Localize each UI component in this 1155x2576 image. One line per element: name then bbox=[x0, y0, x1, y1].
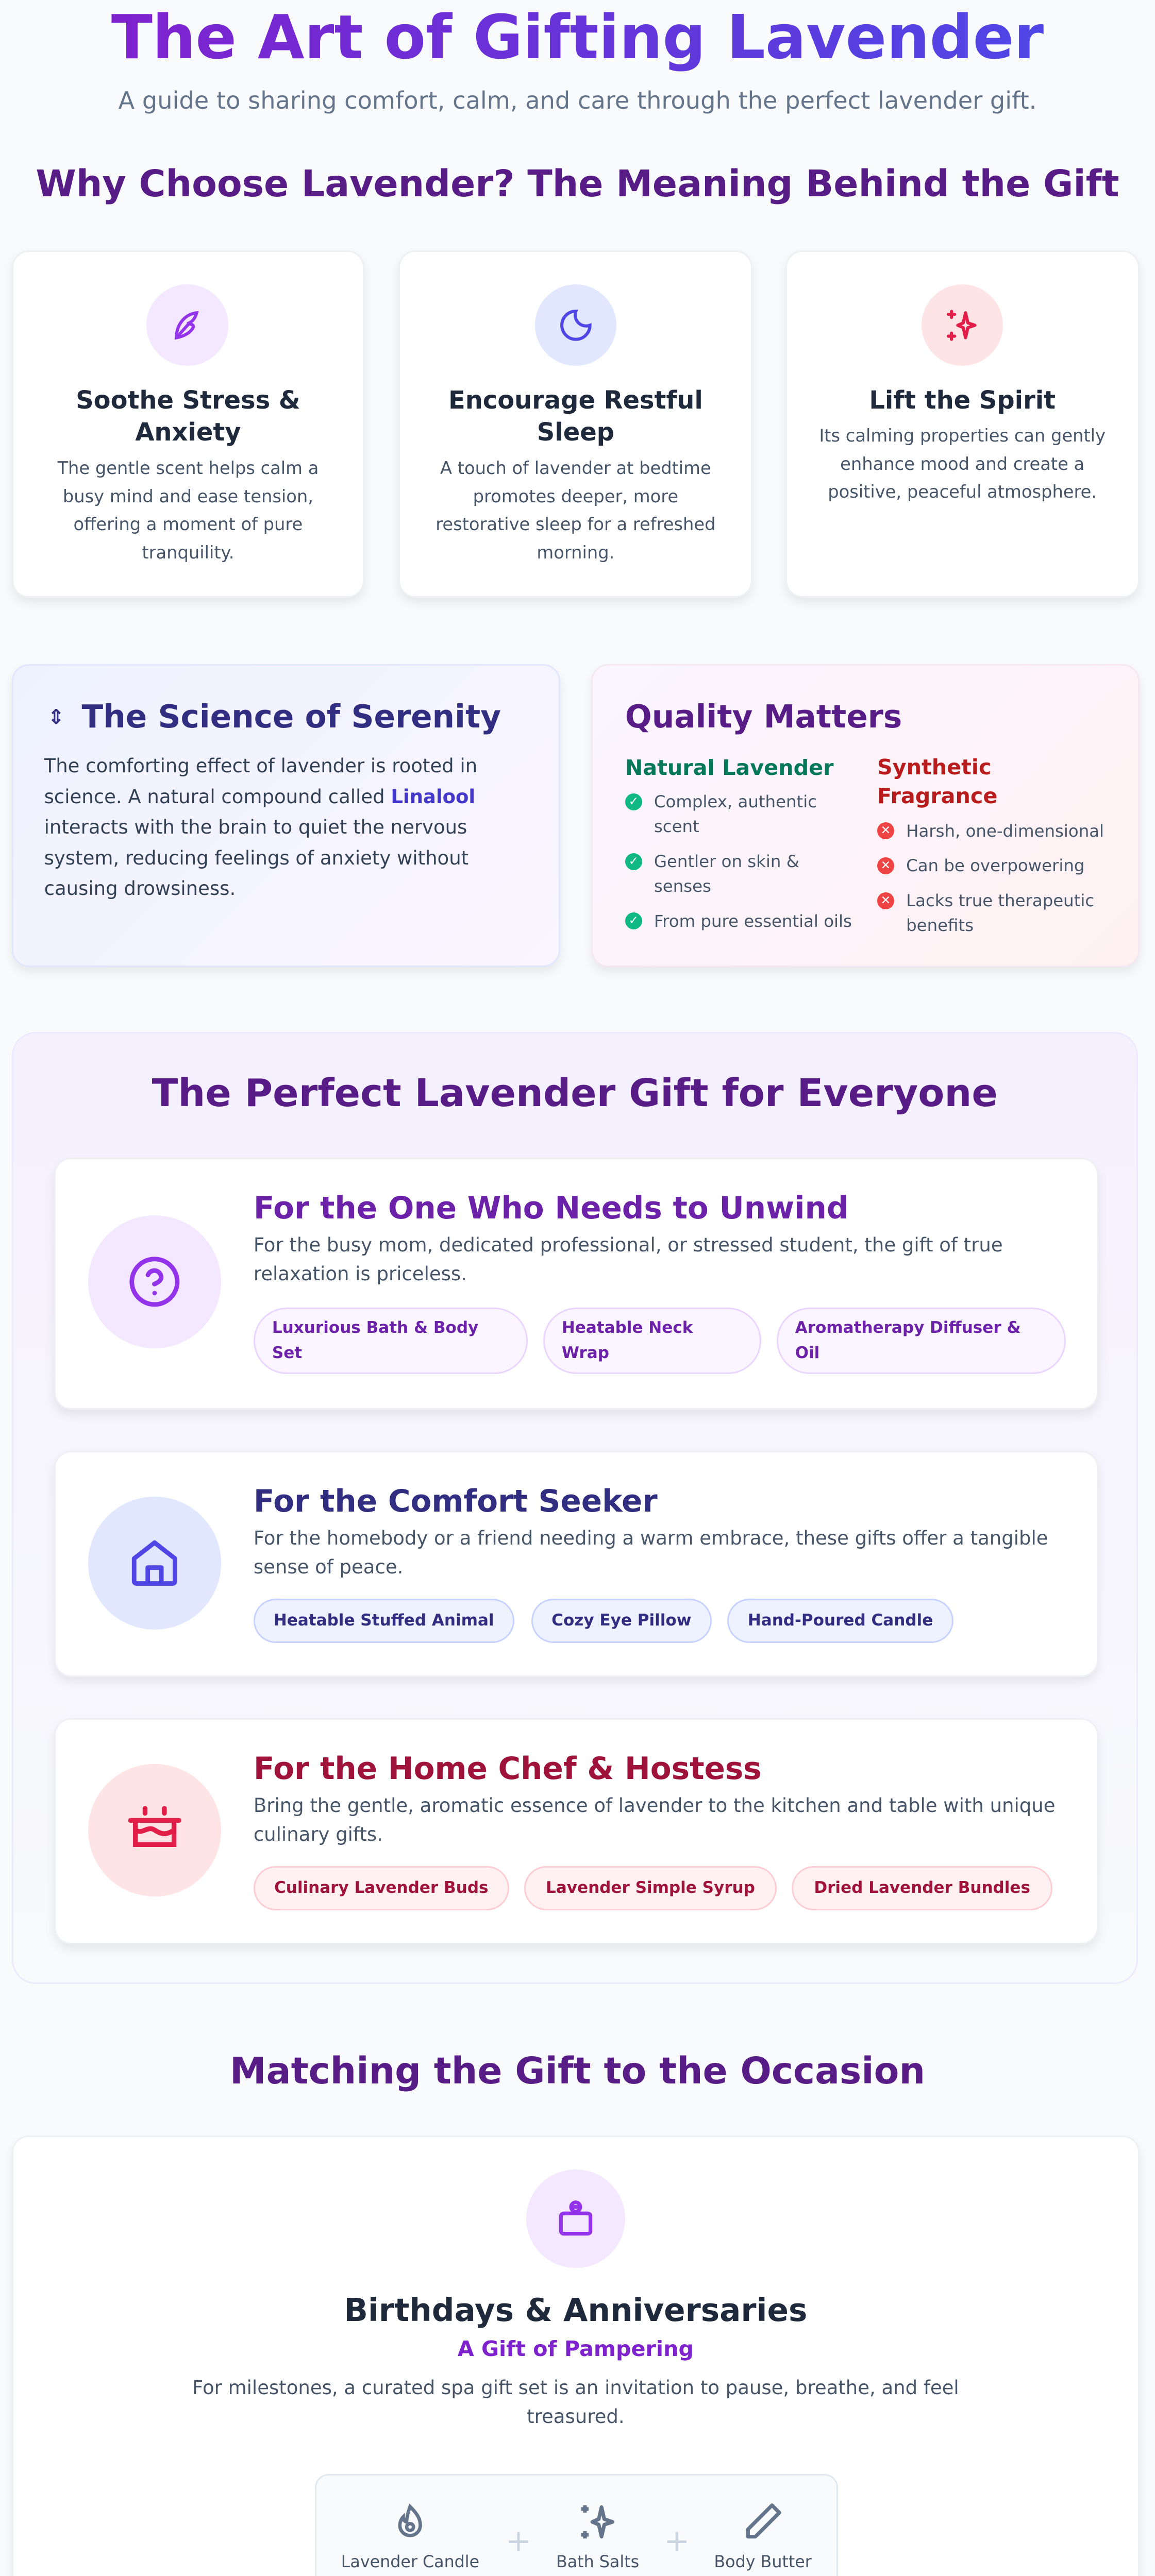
item: body butter bbox=[714, 2503, 812, 2571]
panel: birthdays & anniversaries bbox=[12, 2136, 1140, 2576]
description: Bring the gentle, aromatic essence of lavender to the kitchen and table with unique culinary gifts. bbox=[254, 1794, 1055, 1845]
title: For the Comfort Seeker bbox=[254, 1484, 658, 1519]
gift card: home chef: Lavender Simple Syrup bbox=[546, 1878, 755, 1897]
gift card: comfort seeker: Hand-Poured Candle bbox=[748, 1611, 933, 1630]
occasion text: For milestones, a curated spa gift set is an invitation to pause, breathe, and feel treasured. bbox=[192, 2377, 959, 2428]
panel: science of serenity bbox=[12, 664, 560, 967]
card title: Soothe Stress & bbox=[76, 386, 300, 415]
description: For the busy mom, dedicated professional, or stressed student, the gift of true relaxation is priceless. bbox=[254, 1234, 1003, 1285]
title: The Art of Gifting Lavender bbox=[111, 2, 1044, 73]
icon: sparkles bbox=[922, 284, 1003, 366]
item: body butter: Body Butter bbox=[714, 2553, 812, 2571]
icon: moon bbox=[535, 284, 616, 366]
item: candle: Lavender Candle bbox=[341, 2553, 479, 2571]
gift card: comfort seeker: Cozy Eye Pillow bbox=[551, 1611, 691, 1630]
item: candle bbox=[341, 2503, 479, 2571]
gift card: unwind: Aromatherapy Diffuser & Oil bbox=[795, 1318, 1021, 1362]
panel: lift the spirit bbox=[785, 250, 1140, 598]
card text: The gentle scent helps calm a busy mind and ease tension, offering a moment of pure tranquility. bbox=[57, 458, 319, 563]
subtitle: A guide to sharing comfort, calm, and care through the perfect lavender gift. bbox=[119, 87, 1036, 114]
gift card: home chef: Dried Lavender Bundles bbox=[814, 1878, 1030, 1897]
tags: Heatable Stuffed Animal bbox=[274, 1611, 494, 1630]
column: synthetic: Harsh, one-dimensional bbox=[906, 821, 1104, 841]
column: natural: Gentler on skin & senses bbox=[654, 852, 799, 896]
body text: The comforting effect of lavender is rooted in science. A natural compound called Linalool interacts with the brain to quiet the nervous system, reducing feelings of anxiety without causing drowsiness. bbox=[44, 755, 477, 900]
gift card: unwind bbox=[54, 1158, 1098, 1410]
column: synthetic: Synthetic bbox=[877, 755, 992, 779]
gift card: comfort seeker bbox=[54, 1451, 1098, 1677]
gift set box bbox=[315, 2474, 838, 2576]
heading: matching the gift: Matching the Gift to the Occasion bbox=[230, 2049, 925, 2092]
icon: pot bbox=[88, 1764, 221, 1896]
heading: Quality Matters bbox=[625, 699, 902, 735]
panel: perfect gift for everyone bbox=[12, 1032, 1138, 1984]
column: synthetic: Fragrance bbox=[877, 784, 997, 808]
icon: gift box bbox=[526, 2170, 625, 2268]
column: synthetic: Lacks true therapeutic benefits bbox=[906, 891, 1094, 935]
card text: A touch of lavender at bedtime promotes deeper, more restorative sleep for a refreshed morning. bbox=[436, 458, 715, 563]
column: natural: Complex, authentic scent bbox=[654, 792, 817, 836]
item: bath salts bbox=[556, 2505, 639, 2571]
tags bbox=[254, 1866, 509, 1910]
description: For the homebody or a friend needing a warm embrace, these gifts offer a tangible sense of peace. bbox=[254, 1527, 1048, 1578]
card title: Encourage Restful bbox=[448, 386, 703, 415]
column: natural: ✓ bbox=[629, 914, 639, 927]
card text: Its calming properties can gently enhance mood and create a positive, peaceful atmosphere. bbox=[819, 426, 1106, 502]
tags bbox=[254, 1599, 514, 1643]
column: natural bbox=[625, 755, 852, 931]
column: natural: From pure essential oils bbox=[654, 911, 852, 931]
column: synthetic bbox=[877, 755, 1104, 935]
occasion title: Birthdays & Anniversaries bbox=[344, 2292, 807, 2329]
icon: question bbox=[88, 1215, 221, 1348]
tags bbox=[254, 1308, 528, 1374]
column: synthetic: ✕ bbox=[881, 824, 891, 837]
icon: house bbox=[88, 1497, 221, 1630]
card title bbox=[448, 386, 703, 447]
card title: Sleep bbox=[537, 418, 614, 447]
title: For the Home Chef & Hostess bbox=[254, 1751, 762, 1787]
column: natural: ✓ bbox=[629, 855, 639, 868]
plus: + bbox=[664, 2523, 690, 2559]
plus: + bbox=[506, 2523, 531, 2559]
card title: Lift the Spirit bbox=[869, 386, 1056, 415]
card title bbox=[76, 386, 300, 447]
column: synthetic: ✕ bbox=[881, 894, 891, 907]
panel: restful sleep bbox=[398, 250, 752, 598]
gift card: unwind: Heatable Neck Wrap bbox=[562, 1318, 693, 1362]
panel: soothe stress bbox=[12, 250, 364, 598]
gift card: home chef bbox=[54, 1718, 1098, 1944]
tags: Culinary Lavender Buds bbox=[274, 1878, 489, 1897]
heading: The Perfect Lavender Gift for Everyone bbox=[152, 1071, 998, 1115]
title: For the One Who Needs to Unwind bbox=[254, 1191, 848, 1226]
card title: Anxiety bbox=[135, 418, 241, 447]
occasion subtitle: A Gift of Pampering bbox=[458, 2336, 694, 2361]
heading with icon: ⇕ The Science of Serenity bbox=[47, 699, 501, 735]
column: synthetic: Can be overpowering bbox=[906, 856, 1084, 875]
column: natural: Natural Lavender bbox=[625, 755, 834, 780]
heading: why choose lavender: Why Choose Lavender? The Meaning Behind the Gift bbox=[36, 162, 1119, 205]
column: natural: ✓ bbox=[629, 795, 639, 808]
panel: quality matters bbox=[591, 664, 1140, 967]
column: synthetic: ✕ bbox=[881, 859, 891, 872]
icon: feather bbox=[146, 284, 228, 366]
tags: Luxurious Bath & Body Set bbox=[272, 1318, 478, 1362]
item: bath salts: Bath Salts bbox=[556, 2553, 639, 2571]
